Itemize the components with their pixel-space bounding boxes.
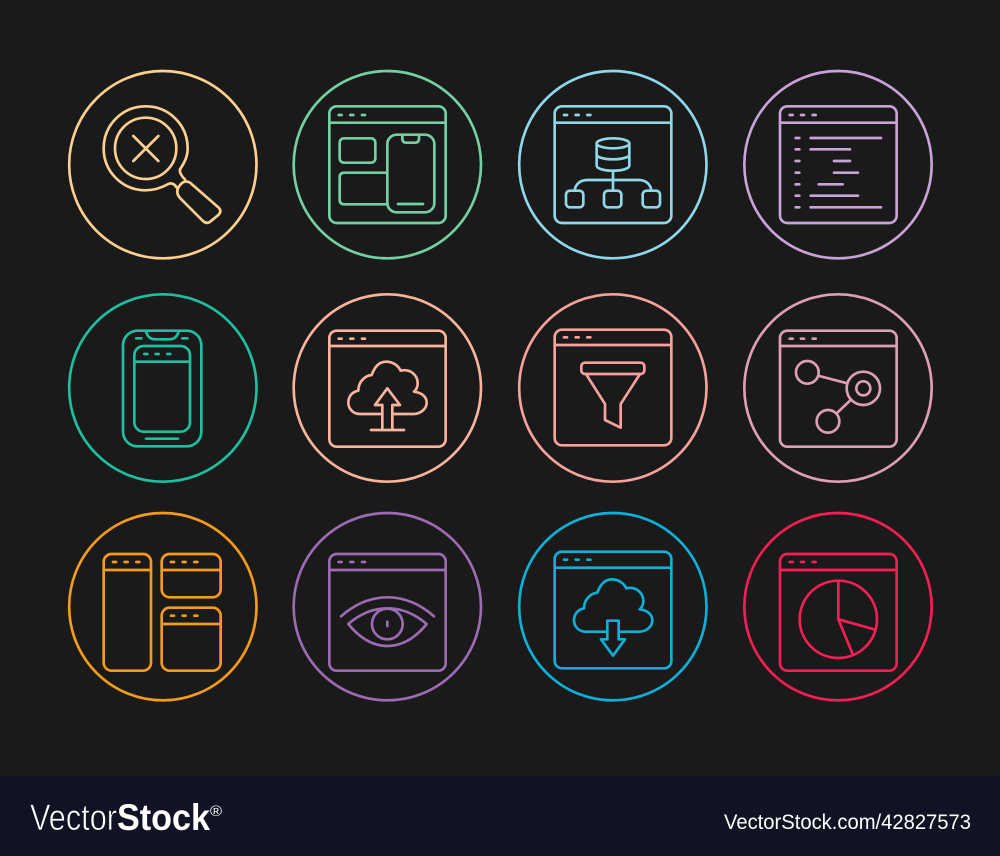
- ring: [69, 294, 256, 482]
- logo: VectorStock: Stock: [117, 797, 210, 838]
- panel: pie chart: [744, 513, 932, 700]
- icon: browser window with database tree: [555, 106, 671, 223]
- panel: window layout: [69, 513, 256, 700]
- panel: cloud download: [519, 513, 706, 700]
- panel: cloud upload: [294, 294, 481, 482]
- panel: code window: [744, 71, 932, 258]
- ring: [744, 294, 932, 482]
- image reference: VectorStock.com/42827573: [724, 811, 971, 834]
- ring: [519, 294, 706, 482]
- ring: [519, 71, 706, 258]
- icon: browser window with code lines: [780, 106, 897, 223]
- panel: filter: [519, 294, 706, 482]
- ring: [294, 71, 481, 258]
- logo: VectorStock: Vector: [30, 797, 117, 838]
- ring: [744, 513, 932, 700]
- logo: VectorStock: [30, 797, 222, 838]
- icon: browser window with share network: [780, 331, 897, 447]
- ring: [294, 513, 481, 700]
- icon: browser window with cloud download: [555, 552, 671, 668]
- icon: three browser windows: [104, 554, 221, 671]
- icon: browser window with funnel: [555, 330, 671, 445]
- footer band: [0, 776, 1000, 856]
- logo: VectorStock: ®: [210, 803, 222, 820]
- ring: [294, 294, 481, 482]
- panel: database network: [519, 71, 706, 258]
- ring: [69, 71, 256, 258]
- panel: eye view: [294, 513, 481, 700]
- ring: [69, 513, 256, 700]
- panel: search error: [69, 71, 256, 258]
- ring: [744, 71, 932, 258]
- icon: magnifier with cross: [104, 106, 220, 223]
- icon: phone with app window: [123, 331, 201, 446]
- panel: share nodes: [744, 294, 932, 482]
- icon: browser window with cloud upload: [329, 331, 446, 447]
- icon: browser window with pie chart: [780, 554, 897, 671]
- panel: responsive layout: [294, 71, 481, 258]
- ring: [519, 513, 706, 700]
- panel: mobile phone: [69, 294, 256, 482]
- icon: browser window with phone: [329, 106, 446, 223]
- icon: browser window with eye: [329, 554, 446, 671]
